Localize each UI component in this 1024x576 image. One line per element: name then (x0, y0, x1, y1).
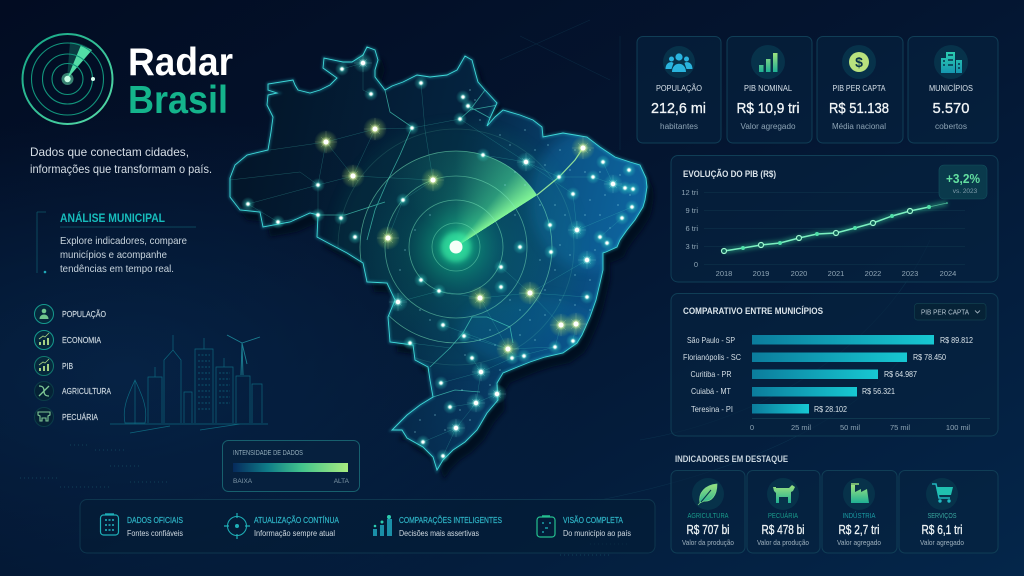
analysis text block: ANÁLISE MUNICIPAL (60, 212, 165, 225)
card: PIB nominal: PIB NOMINAL (744, 84, 793, 93)
feature: dados oficiais: Fontes confiáveis (127, 529, 183, 538)
category list (34, 304, 112, 426)
skyline illustration (110, 335, 268, 433)
bars: 25 mil (791, 423, 811, 432)
card: pecuária: R$ 478 bi (762, 522, 805, 537)
chart axes: 2019 (753, 269, 769, 278)
sweep line to northeast (537, 148, 583, 195)
bars: Cuiabá - MT (691, 386, 731, 396)
bars: 0 (750, 423, 754, 432)
card: população (637, 36, 721, 143)
item: pecuária: PECUÁRIA (62, 413, 99, 422)
panel: municipal comparison bar chart (671, 294, 998, 436)
analysis text block (37, 212, 196, 275)
bottom feature bar (80, 500, 655, 553)
growth badge: +3,2% (946, 172, 980, 186)
coastline glow (230, 47, 647, 470)
bars: Florianópolis - SC (683, 352, 741, 362)
card: municípios: 5.570 (932, 100, 970, 117)
card: PIB per capta: $ (855, 54, 863, 70)
card: municípios (908, 36, 998, 143)
growth badge (939, 165, 987, 199)
heading: indicators: INDICADORES EM DESTAQUE (675, 454, 788, 464)
card: PIB per capta: Média nacional (832, 122, 886, 131)
growth badge: vs. 2023 (953, 188, 978, 195)
state borders (318, 90, 513, 397)
card: agricultura: Valor da produção (682, 538, 734, 547)
card: PIB per capta (817, 36, 903, 143)
card: agricultura: AGRICULTURA (688, 511, 728, 520)
bars: R$ 56.321 (862, 386, 895, 396)
feature: visão completa: Do município ao país (563, 529, 631, 538)
bars (683, 335, 990, 432)
card: PIB per capta: PIB PER CAPTA (832, 84, 886, 93)
feature: atualização contínua: ATUALIZAÇÃO CONTÍNUA (254, 516, 340, 525)
chart axes: 2020 (791, 269, 807, 278)
card: pecuária (747, 470, 820, 553)
dropdown (914, 304, 986, 320)
logo title: Brasil (128, 79, 228, 122)
card: indústria: Valor agregado (837, 538, 881, 547)
item: economia: ECONOMIA (62, 336, 102, 345)
card: indústria: R$ 2,7 tri (838, 522, 880, 537)
radar rings (338, 129, 574, 365)
chart title: EVOLUÇÃO DO PIB (R$) (683, 169, 776, 179)
chart axes: 6 tri (685, 224, 698, 233)
map shadow (227, 50, 667, 490)
card: PIB nominal (727, 36, 812, 143)
card: pecuária: Valor da produção (757, 538, 809, 547)
small lights (400, 90, 630, 432)
card: serviços: Valor agregado (920, 538, 964, 547)
line series (722, 202, 948, 254)
card: municípios: cobertos (935, 122, 967, 131)
chart axes: 2018 (716, 269, 732, 278)
KPI cards (637, 36, 998, 143)
bars: 50 mil (840, 423, 860, 432)
analysis text block: tendências em tempo real. (60, 264, 174, 275)
legend: data intensity: INTENSIDADE DE DADOS (233, 450, 303, 457)
feature: atualização contínua (224, 513, 340, 539)
bars: R$ 28.102 (814, 404, 847, 414)
network lines (230, 63, 633, 456)
card: pecuária: PECUÁRIA (768, 511, 798, 520)
chart axes: 2024 (940, 269, 956, 278)
card: serviços: SERVIÇOS (928, 511, 956, 520)
logo: radar (22, 34, 112, 124)
feature: atualização contínua: Informação sempre atual (254, 529, 335, 538)
legend: data intensity (222, 440, 360, 492)
tagline: informações que transformam o país. (30, 162, 212, 176)
legend: data intensity: BAIXA (233, 478, 253, 485)
indicator cards (671, 470, 998, 553)
item: pib: PIB (62, 362, 73, 371)
feature: comparações inteligentes (373, 515, 502, 538)
bars: Curitiba - PR (690, 369, 732, 379)
chart axes: 2023 (902, 269, 918, 278)
card: agricultura (671, 470, 745, 553)
item: agricultura: AGRICULTURA (62, 387, 112, 396)
map of Brazil (220, 40, 667, 490)
feature: comparações inteligentes: Decisões mais assertivas (399, 529, 479, 538)
chart axes: 9 tri (685, 206, 698, 215)
card: PIB per capta: R$ 51.138 (829, 100, 889, 117)
card: municípios: MUNICÍPIOS (929, 84, 973, 93)
chart axes: 0 (694, 260, 698, 269)
card: serviços (899, 470, 998, 553)
card: indústria (822, 470, 897, 553)
analysis text block: municípios e acompanhe (60, 250, 167, 261)
card: indústria: INDÚSTRIA (842, 511, 876, 520)
logo title (128, 41, 233, 122)
chart axes: 12 tri (681, 188, 698, 197)
panel: GDP evolution line chart (671, 156, 998, 282)
card: população: POPULAÇÃO (656, 84, 702, 93)
legend: data intensity: ALTA (334, 478, 350, 485)
coastline and borders (230, 47, 647, 470)
chart axes: 2022 (865, 269, 881, 278)
dropdown: PIB PER CAPTA (921, 310, 969, 316)
bars: 100 mil (946, 423, 970, 432)
radar sweep (404, 151, 537, 244)
logo title: Radar (128, 41, 233, 84)
card: serviços: R$ 6,1 tri (922, 522, 963, 537)
radar center (441, 232, 471, 262)
bars: R$ 64.987 (884, 369, 917, 379)
card: PIB nominal: R$ 10,9 tri (736, 100, 800, 117)
chart title: COMPARATIVO ENTRE MUNICÍPIOS (683, 306, 823, 316)
chart axes (681, 188, 965, 278)
bars: R$ 78.450 (913, 352, 946, 362)
card: população: habitantes (660, 122, 698, 131)
tagline (30, 145, 212, 176)
bars: R$ 89.812 (940, 335, 973, 345)
feature: visão completa: VISÃO COMPLETA (563, 516, 624, 525)
map land (236, 48, 646, 468)
card: agricultura: R$ 707 bi (686, 522, 730, 537)
item: população: POPULAÇÃO (62, 310, 106, 319)
city nodes (241, 53, 640, 463)
feature: dados oficiais (100, 514, 183, 538)
bars: Teresina - PI (691, 404, 733, 414)
feature: visão completa (537, 516, 631, 538)
card: população: 212,6 mi (651, 100, 706, 117)
chart axes: 3 tri (685, 242, 698, 251)
chart axes: 2021 (828, 269, 844, 278)
bars: São Paulo - SP (687, 335, 735, 345)
card: PIB nominal: Valor agregado (740, 122, 796, 131)
bars: 75 mil (890, 423, 910, 432)
tagline: Dados que conectam cidades, (30, 145, 189, 159)
analysis text block: Explore indicadores, compare (60, 236, 187, 247)
feature: comparações inteligentes: COMPARAÇÕES INTELIGENTES (399, 516, 502, 525)
feature: dados oficiais: DADOS OFICIAIS (127, 516, 183, 525)
